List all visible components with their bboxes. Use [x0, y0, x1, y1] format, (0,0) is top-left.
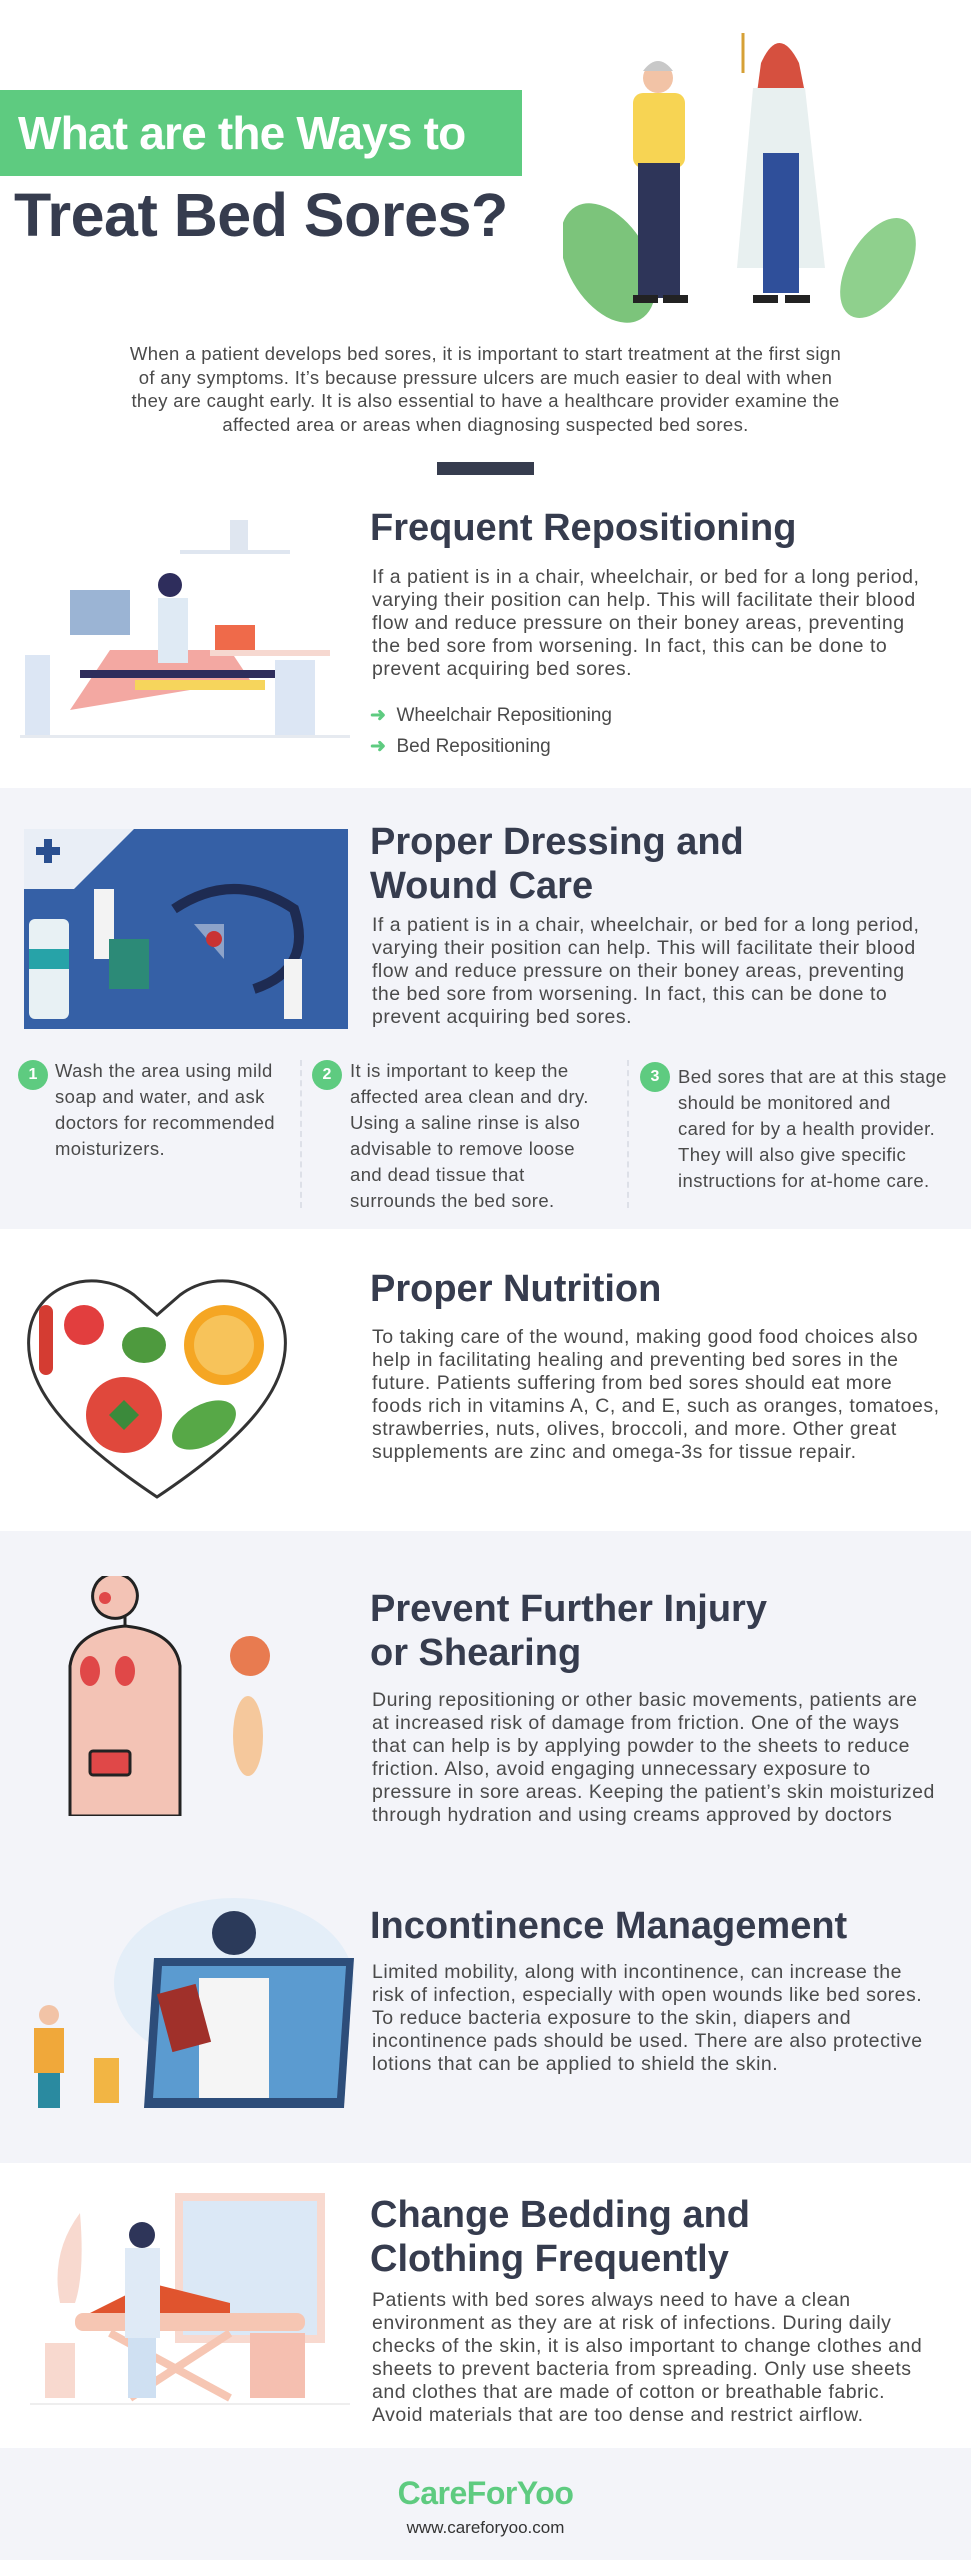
text: flow and reduce pressure on their boney areas, preventing: [372, 612, 905, 634]
step 1: Wash the area using mild: [55, 1060, 273, 1081]
step 3: 3: [651, 1068, 659, 1085]
step 2: advisable to remove loose: [350, 1138, 575, 1159]
text: varying their position can help. This will facilitate their blood: [372, 937, 916, 959]
text: flow and reduce pressure on their boney areas, preventing: [372, 960, 905, 982]
step 2: It is important to keep the: [350, 1060, 569, 1081]
text: that can help is by applying powder to the sheets to reduce: [372, 1735, 910, 1757]
panel: change bedding: [30, 2193, 922, 2426]
heading: Proper Nutrition: [370, 1268, 661, 1310]
step 1: soap and water, and ask: [55, 1086, 265, 1107]
text: incontinence pads should be used. There are also protective: [372, 2030, 923, 2052]
heading: Wound Care: [370, 865, 593, 907]
step 3: Bed sores that are at this stage: [678, 1066, 947, 1087]
intro paragraph: affected area or areas when diagnosing suspected bed sores.: [222, 414, 749, 434]
step 1: moisturizers.: [55, 1138, 165, 1159]
footer url: www.careforyoo.com: [407, 2518, 564, 2537]
step 2: and dead tissue that: [350, 1164, 525, 1185]
text: environment as they are at risk of infections. During daily: [372, 2312, 891, 2334]
illustration: body with sores: [68, 1576, 270, 1816]
text: [372, 914, 919, 1028]
text: [372, 566, 919, 680]
bullet list: ➜ Wheelchair Repositioning: [370, 705, 612, 726]
text: varying their position can help. This will facilitate their blood: [372, 589, 916, 611]
step 3: They will also give specific: [678, 1144, 906, 1165]
illustration: medical blue: [24, 829, 348, 1029]
bullet list: ➜ Bed Repositioning: [370, 736, 551, 757]
step 1: doctors for recommended: [55, 1112, 275, 1133]
step 3: cared for by a health provider.: [678, 1118, 935, 1139]
intro paragraph: [130, 343, 841, 435]
title banner: [0, 90, 522, 176]
text: If a patient is in a chair, wheelchair, or bed for a long period,: [372, 914, 919, 936]
step 3: [640, 1062, 947, 1191]
title second line: Treat Bed Sores?: [14, 181, 508, 249]
text: through hydration and using creams approved by doctors: [372, 1804, 892, 1826]
text: To taking care of the wound, making good food choices also: [372, 1326, 918, 1348]
text: If a patient is in a chair, wheelchair, or bed for a long period,: [372, 566, 919, 588]
text: Limited mobility, along with incontinence, can increase the: [372, 1961, 902, 1983]
step 1: [18, 1060, 275, 1159]
illustration: doctor on screen: [34, 1898, 354, 2108]
text: [372, 2289, 922, 2426]
bullet list: [370, 705, 612, 757]
text: pressure in sore areas. Keeping the patient’s skin moisturized: [372, 1781, 935, 1803]
text: checks of the skin, it is also important to change clothes and: [372, 2335, 922, 2357]
step 2: [312, 1060, 589, 1211]
intro paragraph: of any symptoms. It’s because pressure ulcers are much easier to deal with when: [139, 366, 832, 388]
step 1: 1: [29, 1066, 37, 1083]
heading: Clothing Frequently: [370, 2238, 729, 2280]
text: [372, 1689, 935, 1826]
panel: frequent repositioning: [20, 507, 919, 757]
panel: dressing and wound care: [18, 821, 947, 1211]
text: To reduce bacteria exposure to the skin, diapers and: [372, 2007, 851, 2029]
heading: Change Bedding and: [370, 2194, 750, 2236]
text: lotions that can be applied to shield the skin.: [372, 2053, 778, 2075]
text: the bed sore from worsening. In fact, this can be done to: [372, 635, 887, 657]
text: Avoid materials that are too dense and restrict airflow.: [372, 2404, 864, 2426]
footer logo: CareForYoo: [398, 2475, 573, 2511]
text: [372, 1961, 923, 2075]
text: supplements are zinc and omega-3s for tissue repair.: [372, 1441, 856, 1463]
text: prevent acquiring bed sores.: [372, 1006, 632, 1028]
text: prevent acquiring bed sores.: [372, 658, 632, 680]
heading: Prevent Further Injury: [370, 1588, 767, 1630]
text: sheets to prevent bacteria from spreading. Only use sheets: [372, 2358, 912, 2380]
step 2: affected area clean and dry.: [350, 1086, 589, 1107]
text: the bed sore from worsening. In fact, this can be done to: [372, 983, 887, 1005]
title banner: What are the Ways to: [18, 107, 465, 159]
text: [372, 1326, 940, 1463]
heading: [370, 1588, 767, 1674]
text: at increased risk of damage from friction. One of the ways: [372, 1712, 900, 1734]
panel: nutrition: [27, 1268, 940, 1499]
text: friction. Also, avoid engaging unnecessary exposure to: [372, 1758, 871, 1780]
heading: or Shearing: [370, 1632, 581, 1674]
step 2: 2: [323, 1066, 331, 1083]
panel: incontinence management: [34, 1898, 923, 2108]
intro paragraph: When a patient develops bed sores, it is important to start treatment at the first sign: [130, 343, 841, 364]
text: help in facilitating healing and preventing bed sores in the: [372, 1349, 899, 1371]
step 2: surrounds the bed sore.: [350, 1190, 555, 1211]
step 2: Using a saline rinse is also: [350, 1112, 580, 1133]
heading: Proper Dressing and: [370, 821, 744, 863]
text: future. Patients suffering from bed sores should eat more: [372, 1372, 892, 1394]
heading: Incontinence Management: [370, 1905, 847, 1947]
panel: prevent further injury: [68, 1576, 935, 1826]
text: strawberries, nuts, olives, broccoli, and more. Other great: [372, 1418, 897, 1440]
text: Patients with bed sores always need to have a clean: [372, 2289, 851, 2311]
step 3: instructions for at-home care.: [678, 1170, 930, 1191]
heading: [370, 821, 744, 907]
heading: Frequent Repositioning: [370, 507, 796, 549]
text: and clothes that are made of cotton or breathable fabric.: [372, 2381, 885, 2403]
text: foods rich in vitamins A, C, and E, such as oranges, tomatoes,: [372, 1395, 940, 1417]
text: During repositioning or other basic movements, patients are: [372, 1689, 917, 1711]
illustration: patient and doctor: [563, 33, 916, 323]
text: risk of infection, especially with open wounds like bed sores.: [372, 1984, 922, 2006]
intro paragraph: they are caught early. It is also essential to have a healthcare provider examine the: [131, 390, 840, 411]
illustration: ultrasound: [20, 520, 350, 738]
illustration: hospital bed: [30, 2193, 350, 2405]
heading: [370, 2194, 750, 2280]
illustration: heart of food: [27, 1279, 287, 1499]
step 3: should be monitored and: [678, 1092, 891, 1113]
